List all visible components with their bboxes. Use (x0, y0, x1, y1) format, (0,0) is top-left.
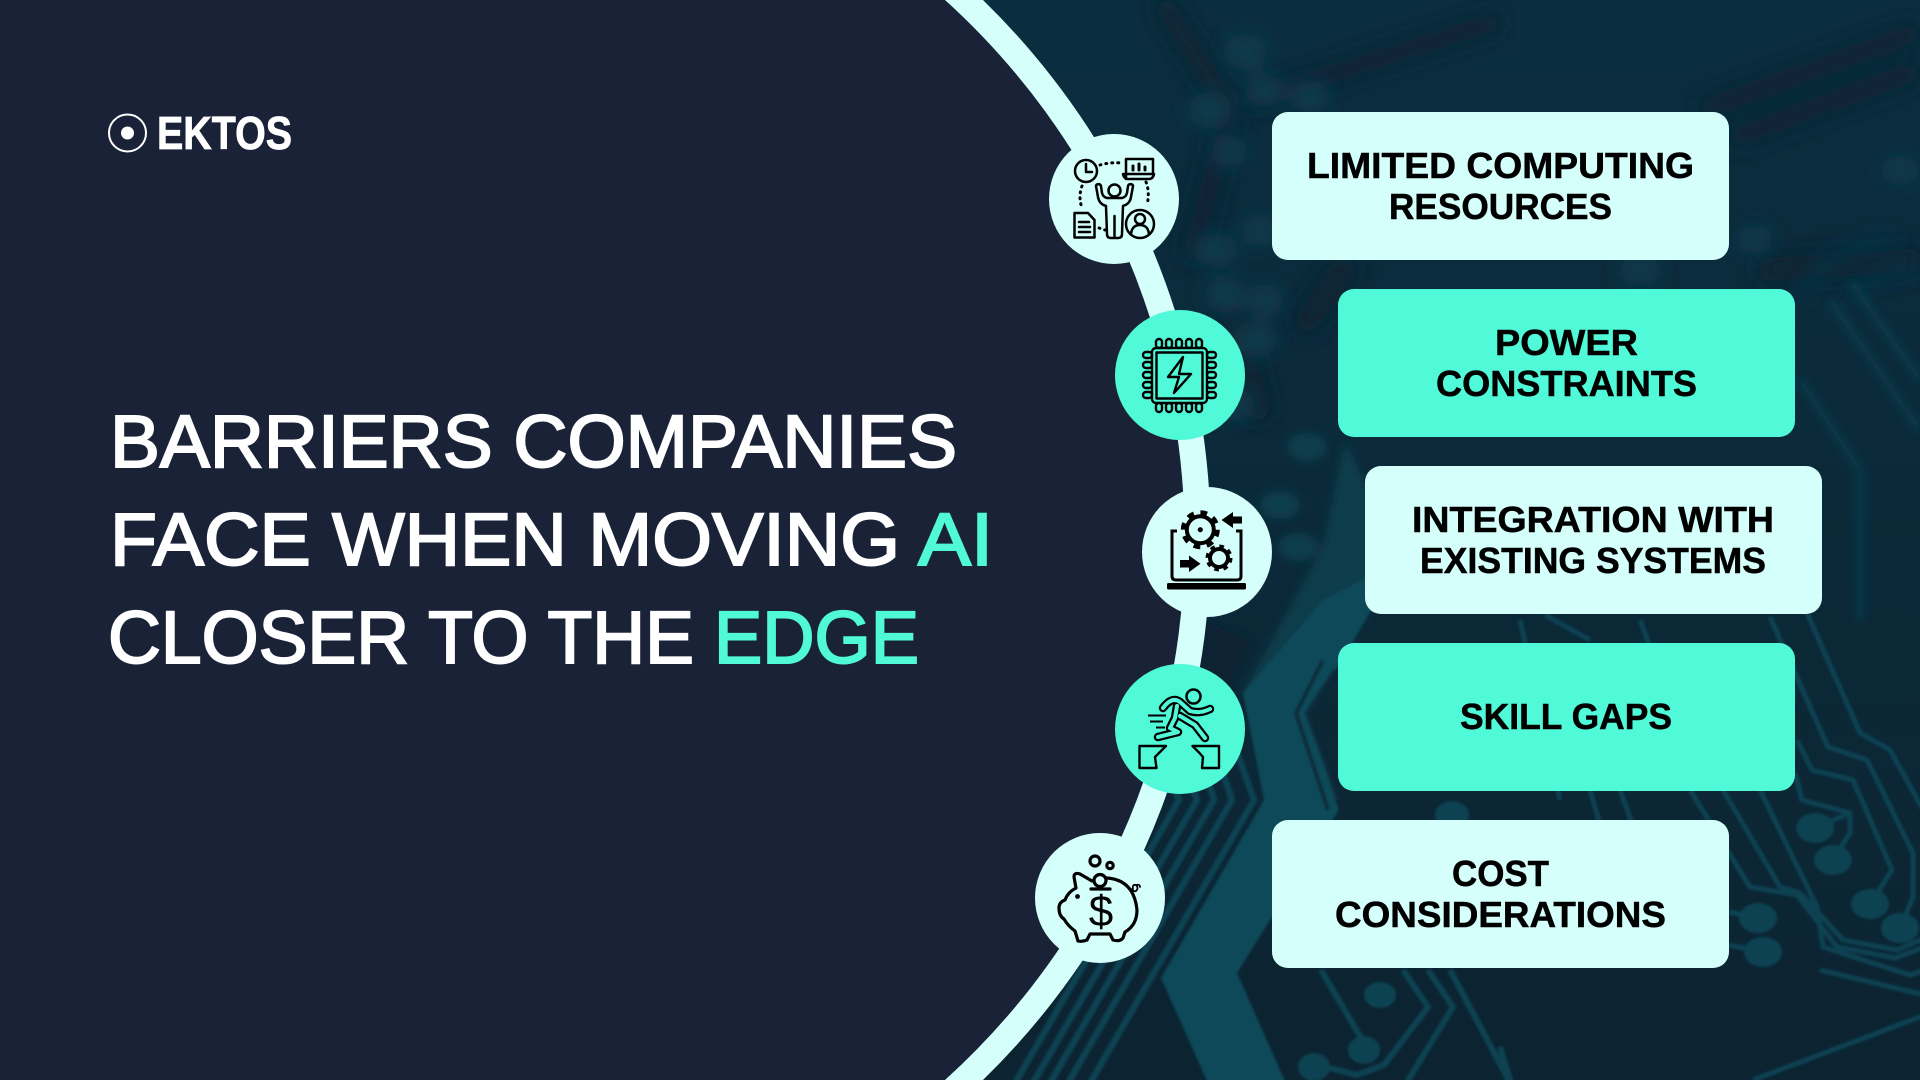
card: integration with existing systems: EXISTING SYSTEMS (1420, 540, 1766, 581)
card: skill gaps: SKILL GAPS (1460, 696, 1672, 737)
circuit traces, sharp lower part (1011, 560, 1920, 1080)
card: cost considerations (1272, 820, 1729, 968)
background: blurred circuit board (900, 0, 1920, 1080)
card: limited computing resources: LIMITED COMPUTING (1307, 145, 1694, 186)
icon: limited computing resources (1049, 134, 1179, 264)
card: limited computing resources: RESOURCES (1389, 186, 1612, 227)
logo: EKTOS: EKTOS (157, 107, 292, 159)
title (108, 400, 993, 679)
card: cost considerations: CONSIDERATIONS (1335, 894, 1666, 935)
title: BARRIERS COMPANIES (110, 400, 957, 483)
card: limited computing resources (1272, 112, 1729, 260)
card: power constraints: CONSTRAINTS (1436, 363, 1697, 404)
icon: cost considerations: $ (1089, 887, 1113, 936)
title: EDGE (714, 596, 919, 679)
card: power constraints: POWER (1495, 322, 1638, 363)
icon: cost considerations (1035, 833, 1165, 963)
left dark panel with arc (900, 0, 1209, 1080)
title: AI (918, 498, 993, 581)
card: cost considerations: COST (1452, 853, 1549, 894)
title: CLOSER TO THE (108, 596, 694, 679)
icon: skill gaps (1115, 664, 1245, 794)
card: skill gaps (1338, 643, 1795, 791)
wide chevron band (1160, 579, 1371, 1080)
icon: power constraints (1115, 310, 1245, 440)
card: integration with existing systems: INTEGRATION WITH (1412, 499, 1774, 540)
card: integration with existing systems (1365, 466, 1822, 614)
card: power constraints (1338, 289, 1795, 437)
logo: EKTOS (109, 107, 292, 159)
icon: integration with existing systems (1142, 487, 1272, 617)
title: FACE WHEN MOVING (110, 498, 900, 581)
